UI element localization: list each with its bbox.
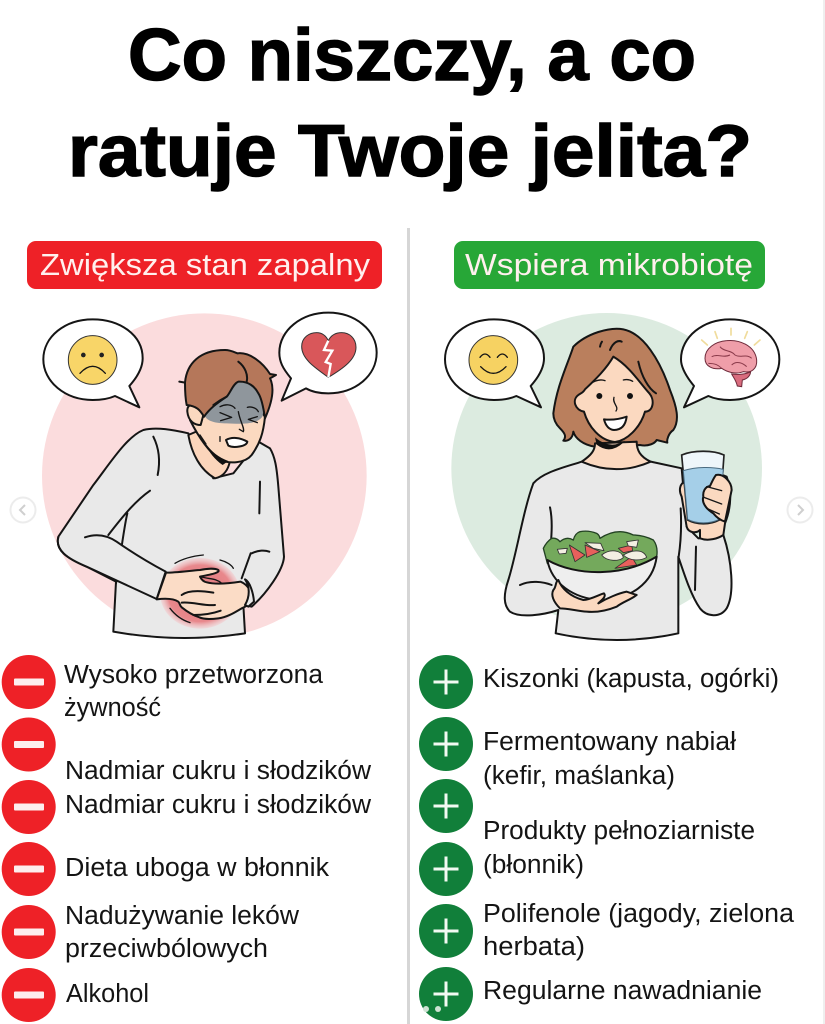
harmful item labels: przeciwbólowych (65, 935, 268, 963)
speech bubble: brain (681, 319, 779, 407)
forearm over belly (58, 535, 166, 599)
heading: red pill (27, 241, 382, 289)
illustration: happy woman with salad and water (445, 313, 779, 640)
harmful item labels: Nadużywanie leków (65, 902, 300, 930)
woman hair (553, 329, 677, 447)
pink background circle (42, 313, 367, 638)
speech bubble: smiley (445, 319, 544, 407)
helpful item labels: Produkty pełnoziarniste (483, 817, 755, 845)
speech bubble: sad face (43, 319, 143, 407)
helpful item labels: Kiszonki (kapusta, ogórki) (483, 665, 779, 693)
title: ratuje Twoje jelita? (68, 111, 752, 192)
salad greens (543, 531, 657, 573)
woman sweater (505, 462, 731, 640)
man sweater (58, 429, 284, 638)
belly pain glow (160, 558, 240, 629)
harmful item labels: Wysoko przetworzona (64, 661, 324, 689)
hand under bowl (552, 580, 637, 612)
helpful item labels: herbata) (483, 933, 585, 961)
heading: green pill: Wspiera mikrobiotę (465, 247, 753, 282)
woman neck (582, 442, 651, 472)
sweater folds (520, 507, 696, 590)
neck (188, 430, 230, 478)
harmful item labels (64, 661, 372, 1008)
title: Co niszczy, a co (128, 15, 696, 96)
center divider (407, 228, 410, 1024)
speech bubble: broken heart (279, 313, 377, 401)
harmful item labels: żywność (64, 694, 161, 722)
helpful item labels: (błonnik) (483, 851, 584, 879)
heading: red pill: Zwiększa stan zapalny (40, 247, 371, 282)
salad bowl (547, 557, 657, 600)
head (179, 350, 276, 465)
list: harmful items (2, 655, 372, 1022)
illustration: man with stomach ache (42, 313, 377, 638)
harmful item labels: Nadmiar cukru i słodzików (65, 757, 372, 785)
harmful item labels: Alkohol (66, 980, 149, 1008)
list: helpful items (419, 655, 795, 1021)
minus icons (2, 655, 56, 1022)
title (68, 15, 752, 192)
heading: green pill (454, 241, 765, 289)
helpful item labels: Regularne nawadnianie (483, 977, 762, 1005)
salad toppings (557, 540, 647, 568)
harmful item labels: Dieta uboga w błonnik (65, 854, 329, 882)
harmful item labels: Nadmiar cukru i słodzików (65, 791, 372, 819)
sweater folds (108, 437, 269, 583)
helpful item labels: (kefir, maślanka) (483, 762, 675, 790)
helpful item labels: Fermentowany nabiał (483, 728, 736, 756)
helpful item labels: Polifenole (jagody, zielona (483, 900, 795, 928)
glass of water (680, 451, 732, 540)
plus icons (419, 655, 473, 1021)
helpful item labels (483, 665, 795, 1005)
green background circle (451, 313, 762, 624)
woman face (575, 341, 656, 449)
hands (157, 555, 254, 623)
carousel dots (423, 1006, 441, 1012)
carousel arrow left (10, 498, 36, 522)
carousel arrow right (788, 498, 812, 522)
